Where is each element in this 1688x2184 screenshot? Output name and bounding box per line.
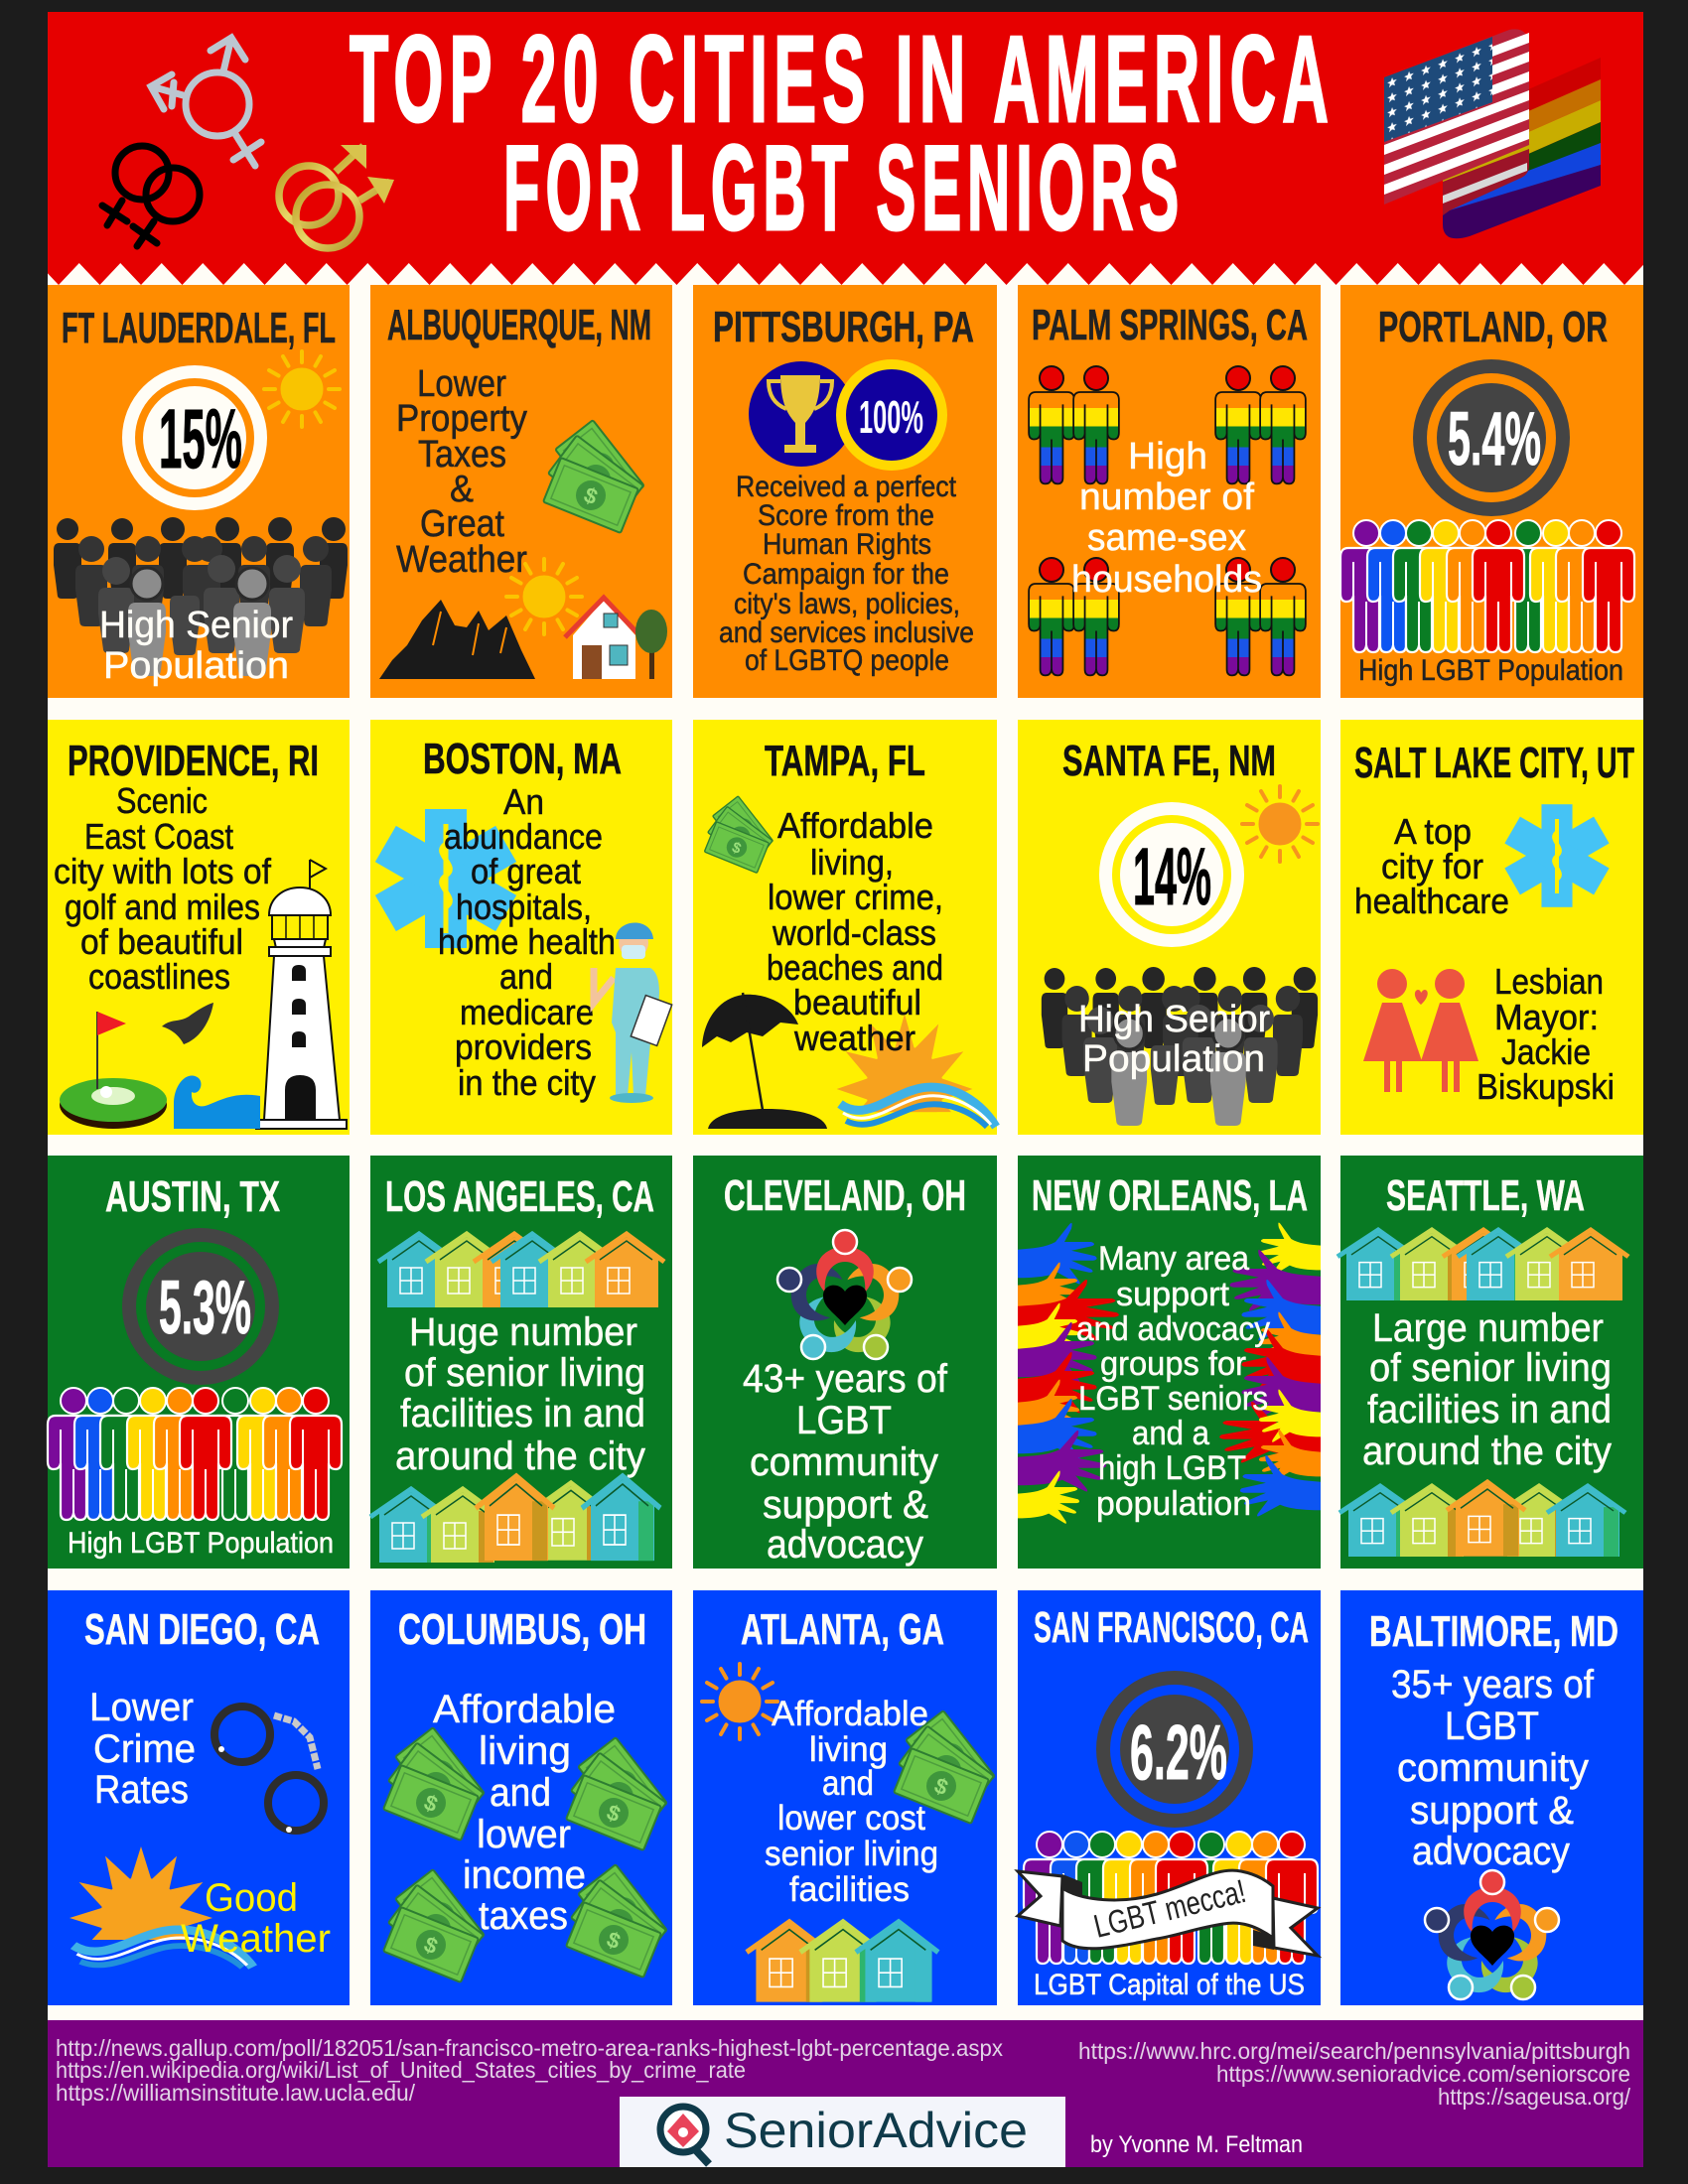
description: groups for: [1100, 1345, 1246, 1383]
description: facilities: [789, 1870, 910, 1909]
description: providers: [455, 1026, 592, 1067]
panel: Santa Fe: [1018, 720, 1321, 1135]
description: of senior living: [404, 1351, 645, 1395]
heading: TAMPA, FL: [765, 737, 925, 785]
panel: Los Angeles: [370, 1156, 672, 1569]
title: [350, 12, 1335, 255]
description: support &: [763, 1483, 928, 1527]
description: community: [1397, 1746, 1589, 1790]
source links left: https://williamsinstitute.law.ucla.edu/: [56, 2080, 416, 2106]
description: and: [499, 956, 553, 997]
caption: good weather: Weather: [181, 1917, 331, 1961]
description: support &: [1410, 1789, 1574, 1833]
caption: LGBT Capital of the US: [1034, 1969, 1305, 2001]
source links right: [1078, 2038, 1631, 2110]
panel: Baltimore: [1340, 1590, 1643, 2005]
description: healthcare: [1354, 811, 1509, 921]
heading: LOS ANGELES, CA: [385, 1172, 654, 1221]
panel: Atlanta: [693, 1590, 997, 2005]
heading: COLUMBUS, OH: [398, 1605, 646, 1654]
description: Large number: [1372, 1306, 1604, 1350]
icon: American and rainbow flag: [1384, 29, 1601, 238]
icon: houses bottom row: [1339, 1482, 1625, 1557]
description: weather: [793, 1018, 915, 1058]
heading: ATLANTA, GA: [741, 1605, 944, 1654]
description: living: [809, 1730, 888, 1769]
caption: [1078, 999, 1270, 1080]
source links right: https://sageusa.org/: [1438, 2084, 1631, 2110]
description: abundance: [444, 816, 603, 857]
description: [1362, 1306, 1612, 1473]
description: Many area: [1098, 1240, 1249, 1278]
description: Affordable: [777, 805, 933, 846]
stat ring 14%: [1099, 802, 1244, 947]
icon: money: [704, 796, 774, 873]
stat badge 100%: [836, 359, 947, 471]
description: 43+ years of: [743, 1357, 948, 1401]
description: healthcare: A top: [1394, 811, 1472, 852]
heading: SAN DIEGO, CA: [84, 1605, 320, 1654]
description: Weather: [396, 539, 527, 581]
description: mayor: Biskupski: [1477, 1066, 1615, 1107]
description: around the city: [1362, 1430, 1612, 1473]
caption: High Senior: [1078, 999, 1270, 1040]
panel: San Francisco: [1018, 1590, 1321, 2005]
icon: sun: [702, 1664, 777, 1739]
description: around the city: [395, 1434, 645, 1478]
description: coastlines: [88, 956, 230, 997]
description: and advocacy: [1076, 1310, 1270, 1348]
description: golf and miles: [65, 887, 260, 927]
caption: good weather: Good: [205, 1876, 298, 1920]
description: LGBT seniors: [1078, 1380, 1268, 1418]
icon: wave: [174, 1075, 260, 1129]
icon: trophy: [749, 361, 854, 467]
banner: LGBT mecca: [1018, 1870, 1318, 1956]
caption: Population: [103, 645, 289, 687]
description: Great: [420, 503, 504, 545]
description: Score from the: [758, 499, 934, 532]
icon: houses top row: [1337, 1230, 1628, 1300]
heading: PALM SPRINGS, CA: [1032, 301, 1308, 349]
description: beaches and: [767, 947, 943, 988]
description: Lower: [417, 363, 506, 405]
description: Affordable: [772, 1695, 928, 1733]
description: [54, 780, 272, 997]
panel: Salt Lake City: [1340, 720, 1643, 1135]
panel: Albuquerque: [370, 285, 672, 698]
icon: sun: [1242, 786, 1318, 862]
stat ring 6.2%: 6.2%: [1130, 1708, 1227, 1796]
caption: good weather: [181, 1876, 331, 1961]
description: [1076, 1240, 1270, 1523]
description: [767, 805, 943, 1058]
icon: seagull: [162, 1003, 213, 1044]
panel: Austin: [48, 1156, 350, 1569]
stat ring 6.2%: [1096, 1671, 1253, 1828]
heading: PITTSBURGH, PA: [713, 303, 974, 351]
description: [438, 781, 616, 1103]
icon: community ring: [1425, 1870, 1559, 2003]
description: taxes: [479, 1894, 568, 1938]
panel: Portland: [1340, 285, 1643, 698]
description: LGBT: [796, 1399, 892, 1442]
crowd icon: [1042, 967, 1318, 1126]
heading: BOSTON, MA: [423, 735, 622, 783]
logo: SeniorAdvice: SeniorAdvice: [724, 2103, 1028, 2158]
description: high LGBT: [1098, 1449, 1246, 1487]
panel: Pittsburgh: [693, 285, 997, 698]
heading: ALBUQUERQUE, NM: [387, 301, 651, 349]
icon: transgender symbol: [151, 38, 261, 166]
description: [433, 1688, 616, 1938]
caption: Population: [1082, 1038, 1265, 1080]
source links right: https://www.senioradvice.com/seniorscore: [1216, 2061, 1630, 2087]
icon: rainbow people: [1340, 520, 1634, 652]
description: Rates: [94, 1768, 189, 1812]
icon: houses: [747, 1922, 938, 2002]
icon: money: [543, 420, 644, 533]
description: of great: [471, 851, 581, 891]
icon: star of life: [375, 809, 516, 948]
panel: Cleveland: [693, 1156, 997, 1569]
description: Affordable: [433, 1688, 616, 1731]
source links right: https://www.hrc.org/mei/search/pennsylvania/pittsburgh: [1078, 2038, 1630, 2064]
heading: AUSTIN, TX: [105, 1172, 280, 1221]
icon: money: [894, 1710, 995, 1824]
footer: [48, 2020, 1643, 2167]
header banner: [48, 12, 1643, 285]
description: [395, 1310, 645, 1478]
icon: money: [383, 1727, 667, 1982]
panel: Boston: [370, 720, 672, 1135]
caption: [99, 605, 293, 687]
description: healthcare: healthcare: [1354, 881, 1509, 921]
description: Scenic: [116, 780, 208, 821]
description: and a: [1132, 1415, 1209, 1452]
icon: gay male symbol: [279, 145, 394, 248]
icon: sun: [506, 559, 582, 634]
heading: SAN FRANCISCO, CA: [1034, 1603, 1309, 1652]
heading: NEW ORLEANS, LA: [1032, 1171, 1308, 1220]
heading: FT LAUDERDALE, FL: [62, 304, 336, 352]
icon: community ring: [777, 1230, 912, 1363]
panel: Providence: [48, 720, 350, 1135]
description: lower: [477, 1813, 571, 1856]
description: senior living: [765, 1835, 938, 1873]
logo: SeniorAdvice: [620, 2097, 1065, 2167]
description: in the city: [458, 1062, 596, 1103]
icon: mountains: [379, 600, 535, 679]
description: mayor: [1477, 961, 1615, 1107]
caption: High LGBT Population: [1358, 654, 1623, 687]
source links left: [56, 2035, 1003, 2106]
icon: sun and wave: [837, 1014, 996, 1164]
icon: sun: [264, 351, 340, 427]
source links left: https://en.wikipedia.org/wiki/List_of_United_States_cities_by_crime_rate: [56, 2057, 746, 2083]
icon: houses bottom row: [370, 1476, 660, 1563]
description: of beautiful: [80, 921, 243, 962]
description: number of: [1079, 477, 1254, 518]
description: facilities in and: [400, 1392, 645, 1435]
description: Lower: [89, 1686, 194, 1729]
stat ring 15%: [122, 365, 267, 510]
description: support: [1116, 1276, 1230, 1313]
description: LGBT: [1445, 1705, 1539, 1748]
description: medicare: [460, 992, 594, 1032]
description: healthcare: city for: [1381, 846, 1483, 887]
icon: doctor: [594, 922, 672, 1103]
panel: Tampa: [693, 720, 997, 1164]
description: An: [503, 781, 544, 822]
panel: New Orleans: [1018, 1156, 1321, 1569]
icon: rainbow people: [1024, 1832, 1318, 1964]
description: East Coast: [84, 816, 233, 857]
description: of senior living: [1369, 1346, 1612, 1390]
description: world-class: [772, 912, 936, 953]
heading: SEATTLE, WA: [1386, 1171, 1585, 1220]
description: mayor: Lesbian: [1494, 961, 1604, 1002]
description: Property: [396, 398, 527, 440]
panel: Seattle: [1337, 1156, 1643, 1569]
description: Human Rights: [763, 528, 931, 561]
stat ring 5.3%: 5.3%: [159, 1266, 251, 1350]
description: [743, 1357, 948, 1567]
panel: Columbus: [370, 1590, 672, 2005]
icon: houses top row: [378, 1234, 664, 1307]
description: Crime: [93, 1727, 196, 1771]
description: [1071, 436, 1262, 601]
description: lower cost: [777, 1799, 925, 1838]
white content sheet: [48, 263, 1643, 2025]
description: home health: [438, 921, 616, 962]
source links left: http://news.gallup.com/poll/182051/san-francisco-metro-area-ranks-highest-lgbt-percentage.aspx: [56, 2035, 1003, 2061]
description: beautiful: [793, 982, 921, 1023]
stat ring 15%: 15%: [159, 392, 242, 485]
description: facilities in and: [1367, 1388, 1612, 1432]
icon: rainbow couples: [1029, 366, 1306, 675]
description: and: [822, 1764, 874, 1803]
description: lower crime,: [768, 877, 943, 917]
description: [89, 1686, 196, 1812]
description: city's laws, policies,: [734, 588, 960, 620]
icon: beach umbrella: [702, 993, 827, 1129]
author credit: by Yvonne M. Feltman: [1090, 2131, 1303, 2158]
description: Huge number: [409, 1310, 637, 1354]
icon: house and tree: [565, 598, 667, 679]
description: living: [479, 1729, 571, 1773]
description: population: [1096, 1485, 1251, 1523]
description: &: [450, 469, 474, 510]
icon: sun and wave: [70, 1846, 253, 1989]
caption: High LGBT Population: [68, 1527, 334, 1560]
description: community: [750, 1440, 938, 1484]
stat ring 5.3%: [122, 1228, 279, 1385]
stat ring 5.4%: [1413, 359, 1570, 516]
description: High: [1128, 436, 1207, 478]
description: Campaign for the: [743, 558, 949, 591]
description: and services inclusive: [719, 616, 974, 649]
crowd icon: [54, 517, 348, 676]
description: households: [1071, 559, 1262, 601]
icon: golf green and flag: [60, 1012, 167, 1129]
stat ring 5.4%: 5.4%: [1448, 397, 1541, 481]
heading: CLEVELAND, OH: [724, 1171, 966, 1220]
description: of LGBTQ people: [745, 644, 949, 677]
description: and: [490, 1771, 551, 1815]
description: income: [463, 1853, 586, 1897]
description: city with lots of: [54, 851, 272, 891]
description: [396, 363, 527, 581]
description: Received a perfect: [736, 471, 957, 503]
icon: star of life: [1504, 804, 1610, 907]
icon: handcuffs: [214, 1706, 324, 1833]
caption: High Senior: [99, 605, 293, 646]
panel: Ft Lauderdale: [48, 285, 350, 698]
icon: rainbow people: [48, 1388, 342, 1520]
description: mayor: Mayor:: [1494, 997, 1599, 1037]
icon: lighthouse: [256, 860, 347, 1129]
description: Taxes: [418, 434, 506, 476]
icon: lesbian couple: [1363, 969, 1478, 1092]
description: advocacy: [1412, 1830, 1570, 1873]
description: mayor: Jackie: [1501, 1031, 1591, 1072]
panel: Palm Springs: [1018, 285, 1321, 698]
description: [765, 1695, 938, 1909]
description: hospitals,: [456, 887, 592, 927]
heading: SANTA FE, NM: [1062, 737, 1276, 785]
icon: lesbian symbol: [102, 146, 200, 246]
description: living,: [810, 842, 894, 883]
description: advocacy: [767, 1523, 923, 1567]
heading: PROVIDENCE, RI: [68, 737, 319, 785]
banner: LGBT mecca: LGBT mecca!: [1090, 1872, 1249, 1945]
stat ring 14%: 14%: [1133, 832, 1211, 922]
description: [719, 471, 974, 677]
description: 35+ years of: [1391, 1663, 1595, 1706]
description: same-sex: [1087, 517, 1246, 559]
icon: rainbow hands: [1018, 1223, 1321, 1524]
description: [1391, 1663, 1595, 1873]
panel: San Diego: [48, 1590, 350, 2005]
stat badge 100%: 100%: [859, 391, 923, 443]
